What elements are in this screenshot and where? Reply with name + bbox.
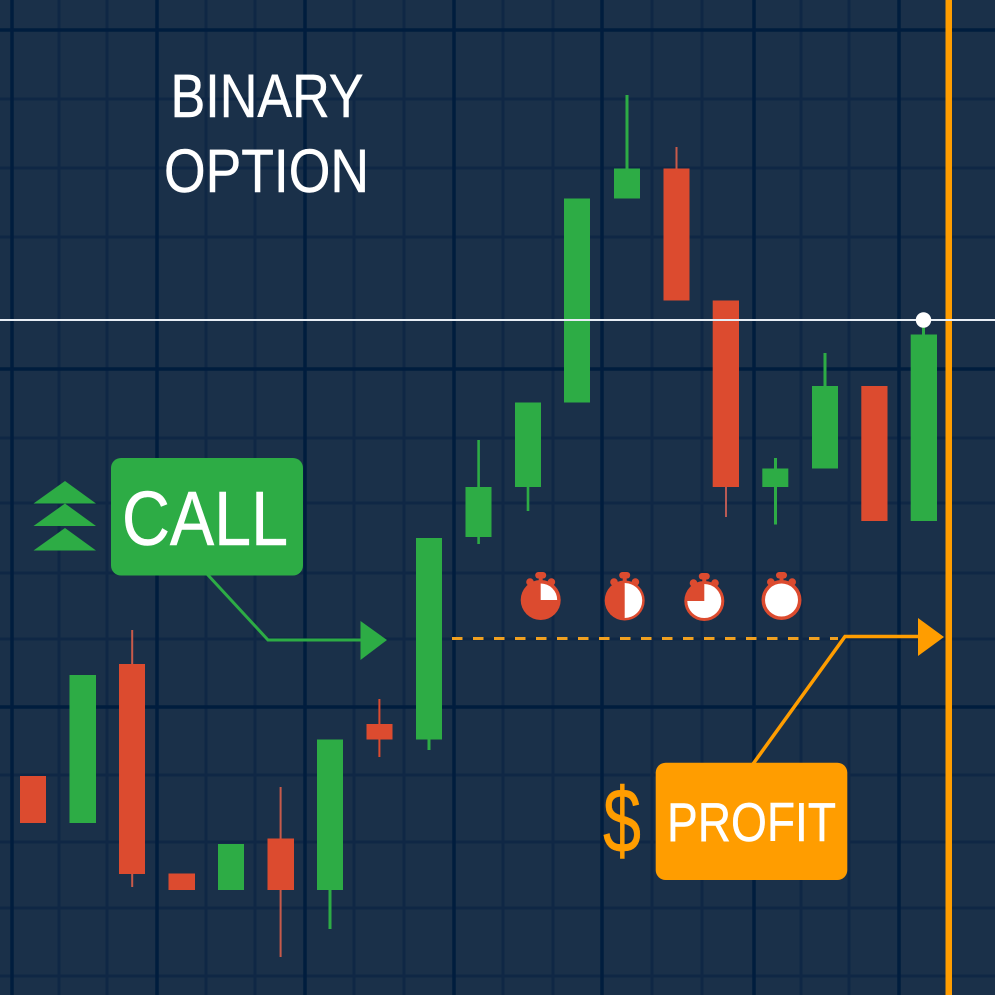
title: BINARY [170, 62, 364, 130]
call label: CALL [122, 476, 288, 562]
icon: dollar sign: $ [603, 770, 641, 872]
candlestick chart [20, 95, 937, 957]
stopwatch: full [762, 572, 802, 620]
call arrow [207, 574, 387, 660]
call label [111, 458, 303, 576]
profit label [656, 763, 847, 880]
stopwatch: half [605, 572, 645, 620]
stopwatch timers [521, 572, 802, 621]
stopwatch: three quarters [684, 573, 724, 621]
stopwatch: one quarter remaining [521, 572, 561, 620]
profit arrow [753, 618, 944, 764]
profit label: PROFIT [667, 791, 836, 853]
price level line [0, 319, 995, 321]
title [164, 62, 369, 205]
icon: triple up chevrons [34, 481, 96, 550]
title: OPTION [164, 137, 369, 205]
current price marker [916, 312, 931, 328]
dashed time-to-expiry line [452, 637, 838, 640]
expiry vertical line [946, 0, 952, 995]
